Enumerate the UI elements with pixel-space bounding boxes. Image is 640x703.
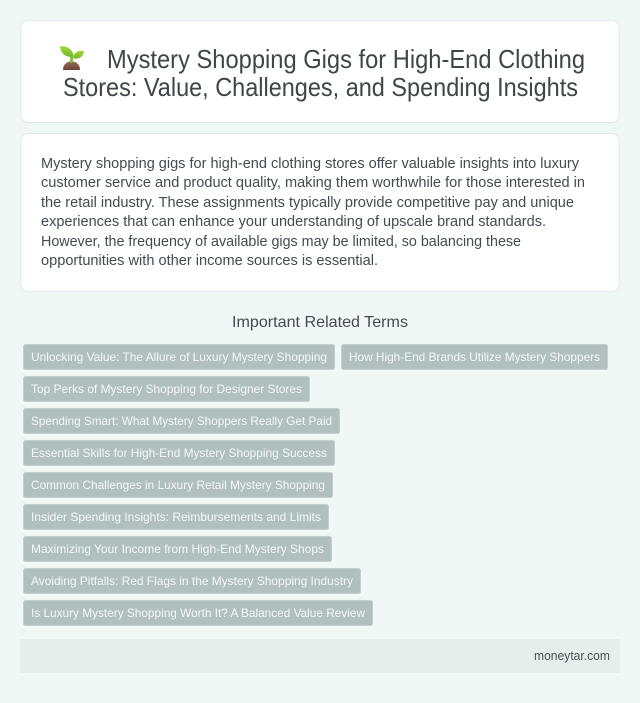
- heading: related terms: Important Related Terms: [232, 314, 408, 331]
- title: Mystery Shopping Gigs for High-End Clothing: [107, 46, 585, 74]
- footer: [20, 639, 620, 673]
- panel: summary text: opportunities with other income sources is essential.: [41, 253, 378, 269]
- panel: summary text: experiences that can enhance your understanding of upscale brand standards.: [41, 214, 546, 230]
- related term tags: Spending Smart: What Mystery Shoppers Really Get Paid: [31, 414, 332, 428]
- related term tags: Common Challenges in Luxury Retail Mystery Shopping: [31, 478, 325, 492]
- related term tags: Insider Spending Insights: Reimbursements and Limits: [31, 510, 321, 524]
- related term tags: Essential Skills for High-End Mystery Shopping Success: [31, 446, 327, 460]
- title: [63, 46, 585, 102]
- panel: summary text: However, the frequency of available gigs may be limited, so balancing these: [41, 234, 521, 250]
- related term tags: How High-End Brands Utilize Mystery Shoppers: [349, 350, 600, 364]
- panel: summary text: [20, 134, 620, 292]
- related term tags: Maximizing Your Income from High-End Mystery Shops: [31, 542, 324, 556]
- related term tags: [24, 344, 608, 626]
- panel: summary text: customer service and product quality, making them worthwhile for those interested in: [41, 175, 585, 191]
- title: Stores: Value, Challenges, and Spending Insights: [63, 74, 578, 102]
- related term tags: Avoiding Pitfalls: Red Flags in the Mystery Shopping Industry: [31, 574, 353, 588]
- panel: summary text: Mystery shopping gigs for high-end clothing stores offer valuable insights into luxury: [41, 156, 580, 172]
- related term tags: Is Luxury Mystery Shopping Worth It? A Balanced Value Review: [31, 606, 365, 620]
- panel: title card: [20, 20, 620, 122]
- related term tags: Top Perks of Mystery Shopping for Designer Stores: [31, 382, 302, 396]
- panel: summary text: the retail industry. These assignments typically provide competitive pay and unique: [41, 195, 574, 211]
- icon: seedling: [60, 46, 84, 70]
- related term tags: Unlocking Value: The Allure of Luxury Mystery Shopping: [31, 350, 327, 364]
- footer: moneytar.com: [534, 648, 610, 663]
